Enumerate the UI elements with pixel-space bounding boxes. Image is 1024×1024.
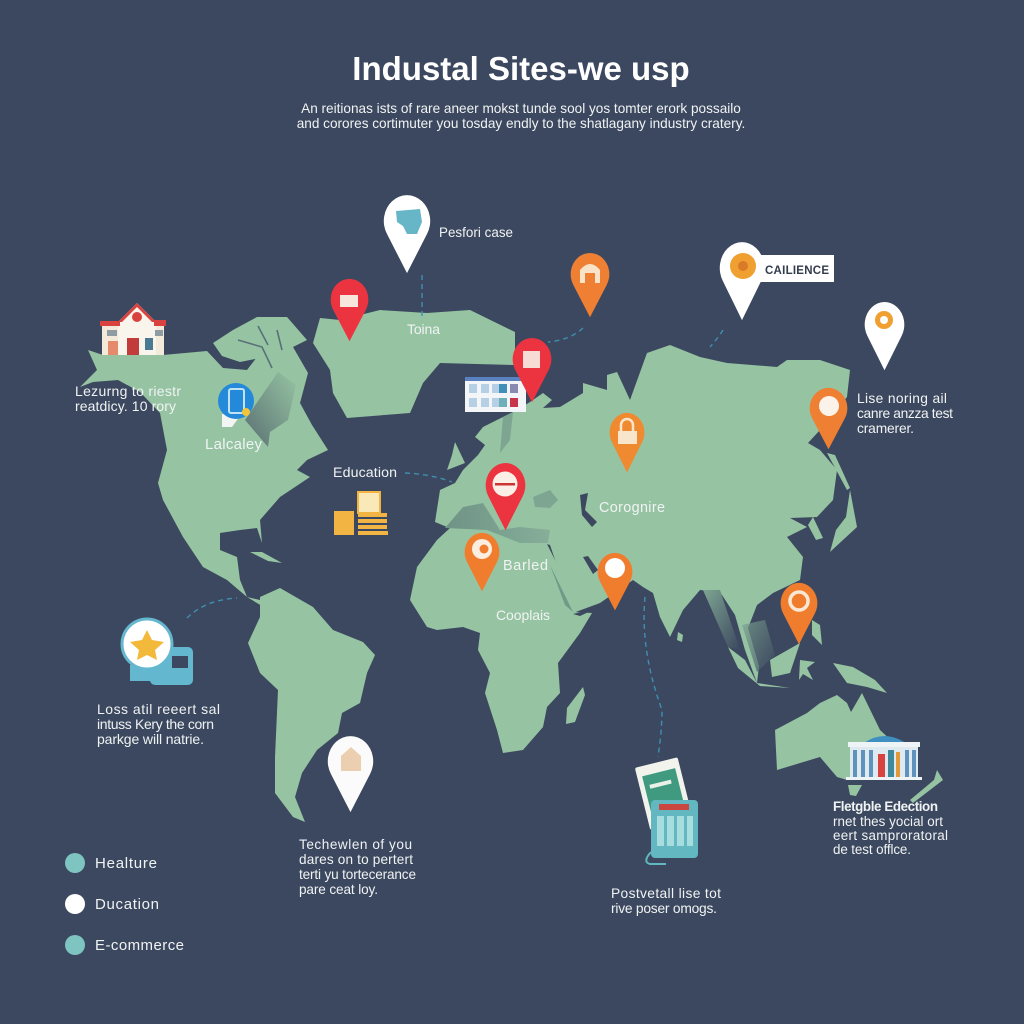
greenland	[313, 310, 515, 418]
subtitle: An reitionas ists of rare aneer mokst tunde sool yos tomter erork possailo	[301, 101, 741, 116]
text: right note	[857, 391, 953, 436]
pin: orange russia	[610, 413, 644, 472]
text: lower right note: rnet thes yocial ort	[833, 814, 943, 829]
legend: education: Ducation	[95, 896, 159, 913]
label: barled: Barled	[503, 558, 548, 574]
africa	[410, 525, 592, 753]
text: bottom middle note	[299, 837, 416, 897]
label: cooplais: Cooplais	[496, 607, 550, 623]
text: bottom middle note: dares on to pertert	[299, 852, 413, 867]
text: bottom middle note: pare ceat loy.	[299, 882, 378, 897]
icon: star badge and truck	[122, 619, 193, 685]
text: lower right note: de test offlce.	[833, 842, 911, 857]
text: lower right note: Fletgble Edection	[833, 799, 938, 814]
icon: calendar dashboard	[465, 377, 526, 412]
uk and ireland	[447, 442, 465, 470]
pin: orange arabia	[598, 553, 632, 610]
text: bottom note	[611, 886, 721, 916]
connector lines	[187, 275, 723, 757]
pin: white south america	[328, 736, 373, 812]
text: lower left note: intuss Kery the corn	[97, 716, 214, 732]
world map	[80, 310, 943, 822]
eurasia	[435, 345, 850, 683]
label: lalcaley: Lalcaley	[205, 436, 262, 453]
south america	[248, 588, 375, 822]
label: corognire: Corognire	[599, 500, 665, 516]
pin: red greenland	[331, 279, 368, 341]
icon: school building	[100, 303, 166, 355]
text: lower left note: parkge will natrie.	[97, 731, 204, 747]
text: left note: Lezurng to riestr	[75, 383, 181, 399]
madagascar	[566, 687, 585, 724]
korea	[808, 517, 823, 540]
text: lower left note	[97, 701, 220, 747]
text: bottom note: Postvetall lise tot	[611, 886, 721, 901]
label: education: Education	[333, 465, 397, 481]
japan	[830, 490, 857, 552]
pin: white callout	[720, 242, 834, 320]
sulawesi	[799, 660, 815, 680]
legend	[65, 853, 184, 955]
icon: blue circle device	[218, 383, 254, 427]
text: lower right note	[833, 799, 948, 857]
canadian arctic islands	[213, 317, 307, 362]
legend: healthcare: Healture	[95, 855, 157, 872]
label: toina: Toina	[407, 321, 440, 337]
text: right note: canre anzza test	[857, 406, 953, 421]
pin: red north	[513, 338, 551, 402]
pin: white right	[865, 302, 904, 370]
text: left note: reatdicy. 10 rory	[75, 398, 176, 414]
sakhalin	[827, 453, 850, 490]
title: Industal Sites-we usp	[352, 50, 690, 87]
icon: museum	[846, 736, 922, 780]
pin: white top	[384, 195, 430, 273]
north america	[80, 340, 328, 606]
pin: orange top	[571, 253, 609, 317]
new zealand	[910, 770, 943, 803]
map shading	[238, 326, 775, 672]
text: bottom middle note: Techewlen of you	[299, 837, 412, 852]
text: lower left note: Loss atil reeert sal	[97, 701, 220, 717]
legend: e-commerce: E-commerce	[95, 937, 184, 954]
icon: clipboard and calculator	[635, 757, 698, 864]
sri lanka	[677, 632, 683, 642]
text: right note: Lise noring ail	[857, 391, 947, 406]
pin: orange africa	[465, 533, 499, 591]
pin: red europe	[486, 463, 525, 530]
label: pesfori case: Pesfori case	[439, 225, 513, 240]
text: right note: cramerer.	[857, 421, 914, 436]
sumatra java	[728, 647, 790, 688]
icon: books	[334, 492, 388, 535]
philippines	[812, 620, 822, 645]
text: bottom note: rive poser omogs.	[611, 901, 717, 916]
tasmania	[848, 785, 862, 796]
australia	[775, 693, 896, 780]
borneo	[770, 643, 800, 677]
caribbean	[250, 552, 282, 563]
text: lower right note: eert samproratoral	[833, 828, 948, 843]
text: bottom middle note: terti yu tortecerance	[299, 867, 416, 882]
pin: orange asia east	[810, 388, 847, 449]
subtitle	[297, 101, 745, 131]
callout label: CAILIENCE	[765, 265, 829, 277]
papua	[833, 663, 887, 693]
subtitle: and corores cortimuter you tosday endly to the shatlagany industry cratery.	[297, 116, 745, 131]
text: left note	[75, 383, 181, 414]
pin: orange southeast asia	[781, 583, 817, 644]
